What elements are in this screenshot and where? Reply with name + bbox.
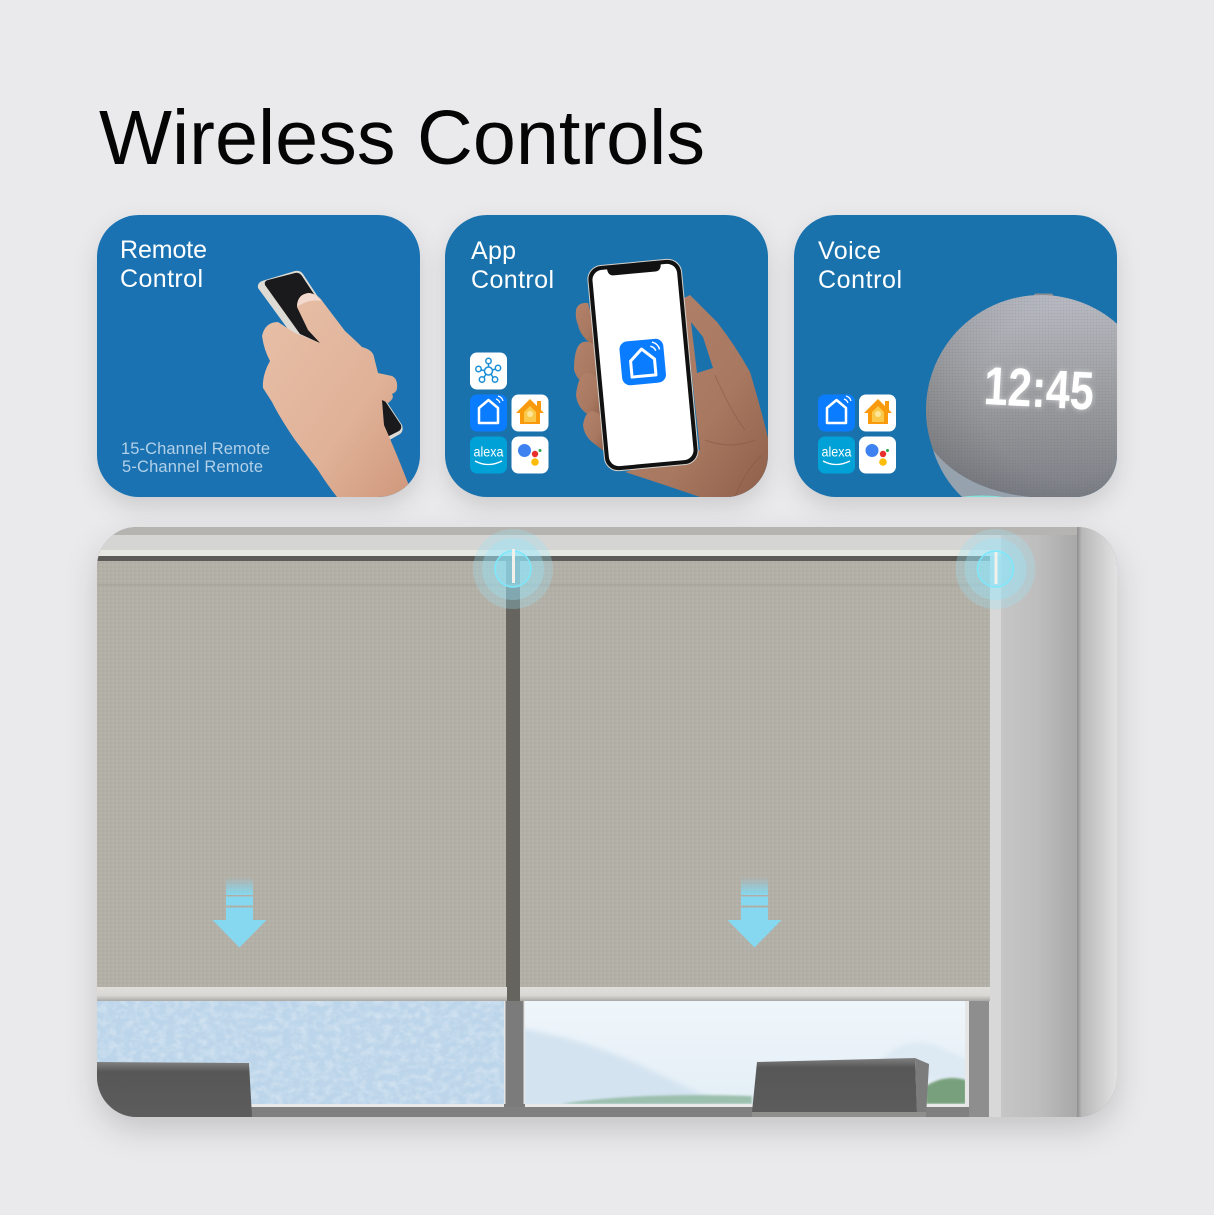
heading: voice control: Voice — [818, 237, 881, 265]
mullion — [506, 560, 520, 1001]
shade top roll shading — [97, 584, 990, 586]
icon: alexa: alexa — [822, 444, 852, 460]
clock display — [984, 366, 1095, 412]
heading: remote control: Remote — [120, 236, 207, 264]
icon: alexa — [470, 436, 507, 474]
icon: smart life app on phone — [619, 338, 667, 386]
title: Wireless Controls — [99, 95, 705, 181]
wall and column — [989, 527, 1117, 1117]
window view: left pane — [97, 1001, 505, 1104]
left bottom rail — [97, 987, 507, 1001]
icon: apple home — [859, 394, 896, 432]
icon: smart life — [470, 394, 507, 432]
window frame — [97, 1001, 989, 1117]
text: remote channel options: 15-Channel Remote — [121, 440, 270, 458]
window header — [97, 527, 1077, 550]
panel: app control — [445, 215, 768, 507]
headrail — [97, 550, 1001, 561]
heading: remote control: Control — [120, 265, 203, 293]
window view: right pane — [520, 1001, 970, 1108]
icon: hand behind phone — [574, 295, 768, 497]
clock display: 12:45 — [982, 356, 1095, 422]
wireless signal left — [473, 529, 553, 609]
arrow down right — [728, 877, 782, 948]
icon: hand holding remote — [258, 271, 412, 497]
left shade fabric — [97, 560, 506, 988]
icon: google assistant — [512, 436, 548, 474]
right bottom rail — [520, 987, 990, 1001]
icon: smart life — [818, 394, 855, 432]
arrow down left — [212, 877, 266, 948]
wireless signal right — [956, 529, 1036, 609]
chair right — [752, 1058, 929, 1117]
icon: apple home — [512, 394, 548, 432]
icon: alexa: alexa — [474, 444, 504, 460]
icon: google assistant — [859, 436, 896, 474]
chair left — [97, 1062, 252, 1117]
heading: voice control: Control — [818, 266, 902, 294]
clock display: 12:45 — [982, 356, 1095, 422]
panel: voice control — [788, 215, 1124, 514]
text: remote channel options: 5-Channel Remote — [122, 458, 263, 476]
panel: remote control — [97, 215, 420, 507]
icon: smartphone — [587, 258, 699, 472]
icon: smart speaker — [926, 294, 1117, 497]
heading: app control: App — [471, 237, 516, 265]
right shade fabric — [519, 560, 990, 988]
icon: alexa — [818, 436, 855, 474]
heading: app control: Control — [471, 266, 554, 294]
panel: window with roller shades — [97, 527, 1117, 1130]
icon: smartthings hub — [470, 352, 507, 390]
